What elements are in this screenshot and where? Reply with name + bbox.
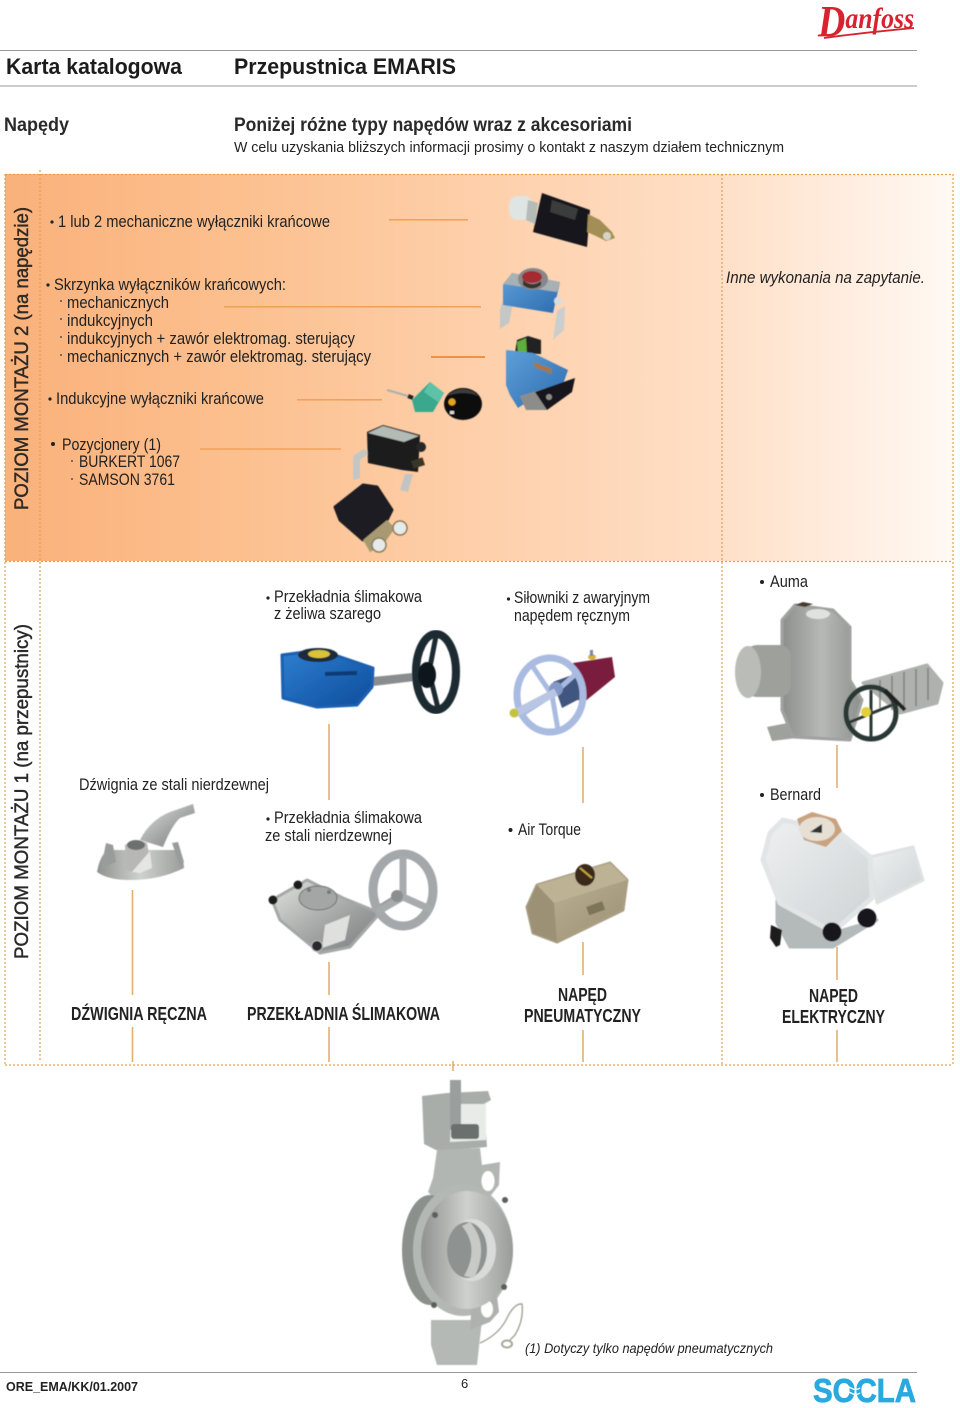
text: limit switch box list: Skrzynka wyłączników krańcowych: [54, 275, 286, 294]
column: worm gear [247, 587, 456, 1062]
text: grey iron gearbox: Przekładnia ślimakowa [274, 587, 422, 606]
icon: mechanical limit switch [509, 193, 615, 247]
connector [328, 1027, 330, 1062]
title: pneumatic actuator [524, 985, 641, 1026]
icon: inductive sensor and black cap [387, 382, 482, 420]
logo: Danfoss: anfoss [845, 2, 914, 36]
footer: document code: ORE_EMA/KK/01.2007 [6, 1379, 138, 1394]
icon: blue limit switch box [500, 268, 565, 340]
logo: Danfoss [817, 0, 914, 46]
panel: mounting level 1 [12, 572, 942, 1062]
text: emergency manual actuators: napędem ręcznym [514, 606, 630, 625]
logo: Socla: SOCLA [813, 1372, 916, 1408]
text: stainless gearbox: Przekładnia ślimakowa [274, 808, 422, 827]
text: grey iron gearbox [266, 587, 422, 623]
text: limit switch box list [46, 275, 371, 366]
connector [582, 942, 584, 975]
title: electric actuator: ELEKTRYCZNY [782, 1007, 885, 1027]
text: stainless gearbox [265, 808, 422, 845]
title: electric actuator [782, 986, 885, 1027]
icon: Bernard electric actuator [763, 812, 923, 947]
connector [836, 1030, 838, 1062]
text: inductive switches: Indukcyjne wyłączniki krańcowe [56, 389, 264, 408]
vertical label: level 2: POZIOM MONTAŻU 2 (na napędzie) [12, 207, 33, 510]
heading: actuators: Napędy [4, 115, 69, 136]
leader lines [200, 220, 485, 449]
text: limit switches: 1 lub 2 mechaniczne wyłączniki krańcowe [58, 212, 330, 231]
connector [328, 962, 330, 995]
text: Auma: Auma [770, 572, 808, 591]
icon: actuator with blue handwheel [510, 650, 615, 732]
text: emergency manual actuators: Siłowniki z awaryjnym [514, 588, 650, 607]
connector [836, 745, 838, 788]
connector [132, 1027, 134, 1062]
title: pneumatic actuator: NAPĘD [558, 985, 607, 1005]
footer: page number: 6 [461, 1376, 468, 1391]
icon: stainless lever [97, 804, 195, 880]
text: emergency manual actuators [507, 588, 650, 625]
connector [132, 890, 134, 995]
column: electric actuator [735, 572, 942, 1062]
text: limit switch box list: indukcyjnych [67, 311, 153, 330]
icon: blue worm gearbox with handwheel [282, 634, 456, 710]
footnote: (1) Dotyczy tylko napędów pneumatycznych [525, 1341, 773, 1356]
icon: EMARIS butterfly valve [402, 1080, 522, 1365]
text: positioners: SAMSON 3761 [79, 470, 175, 489]
text: Air Torque: Air Torque [518, 820, 581, 839]
text: limit switch box list: mechanicznych [67, 293, 169, 312]
text: Bernard: Bernard [770, 785, 821, 804]
title: pneumatic actuator: PNEUMATYCZNY [524, 1006, 641, 1026]
heading: intro: Poniżej różne typy napędów wraz z akcesoriami [234, 115, 632, 136]
text: lever label: Dźwignia ze stali nierdzewnej [79, 775, 269, 794]
icon: pneumatic actuator [527, 863, 627, 942]
icon: blue positioner box [506, 336, 575, 410]
column: manual lever [71, 775, 269, 1062]
title: manual lever: DŹWIGNIA RĘCZNA [71, 1003, 207, 1024]
vertical label: level 1: POZIOM MONTAŻU 1 (na przepustnicy) [12, 624, 33, 959]
column: pneumatic actuator [507, 588, 650, 1062]
icon: Samson positioner [335, 485, 407, 552]
text: positioners: Pozycjonery (1) [62, 435, 161, 454]
connector [328, 724, 330, 800]
icon: Auma electric actuator [735, 602, 942, 741]
icon: stainless worm gearbox with handwheel [268, 854, 433, 953]
title: catalog card: Karta katalogowa [6, 54, 183, 79]
title: product name: Przepustnica EMARIS [234, 54, 456, 79]
text: stainless gearbox: ze stali nierdzewnej [265, 826, 392, 845]
text: intro note: W celu uzyskania bliższych informacji prosimy o kontakt z naszym działem technicznym [234, 140, 784, 156]
title: electric actuator: NAPĘD [809, 986, 858, 1006]
note: other versions: Inne wykonania na zapytanie. [726, 269, 925, 287]
title: worm gear: PRZEKŁADNIA ŚLIMAKOWA [247, 1003, 440, 1024]
connector [582, 1030, 584, 1062]
text: limit switch box list: mechanicznych + zawór elektromag. sterujący [67, 347, 371, 366]
icon: Burkert positioner [353, 425, 426, 492]
text: grey iron gearbox: z żeliwa szarego [274, 604, 381, 623]
text: positioners: BURKERT 1067 [79, 452, 180, 471]
text: limit switch box list: indukcyjnych + zawór elektromag. sterujący [67, 329, 355, 348]
connector [836, 947, 838, 980]
text: positioners [51, 435, 180, 489]
panel: mounting level 2 [5, 174, 953, 561]
connector [582, 747, 584, 803]
